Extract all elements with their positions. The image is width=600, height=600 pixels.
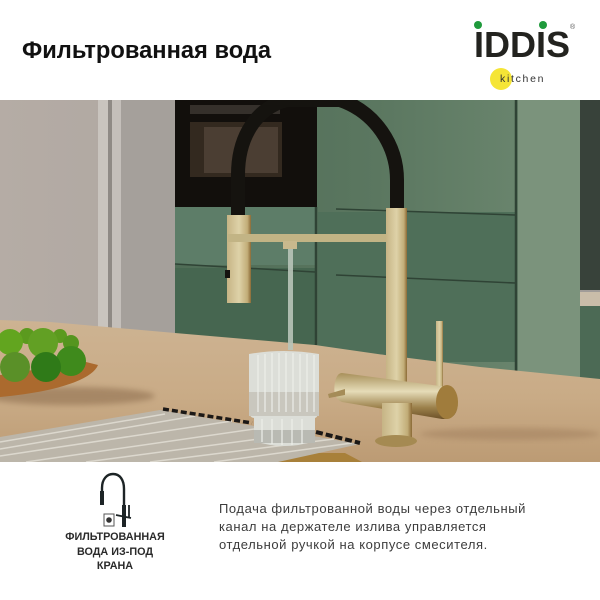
background wall: [0, 100, 600, 462]
wooden countertop: [0, 320, 600, 462]
feature label: КРАНА: [97, 560, 133, 572]
water stream: [288, 248, 293, 350]
photo: kitchen faucet filling a glass: [0, 100, 600, 462]
panel: filtered water feature: [0, 462, 600, 600]
faucet: brass body: [225, 208, 458, 447]
logo: IDDIS kitchen: [474, 21, 576, 90]
faucet: black flexible spout: [238, 100, 397, 216]
title: Фильтрованная вода: [22, 38, 271, 64]
bowl of limes: [0, 328, 98, 397]
counter shadows: [0, 387, 600, 440]
green cabinets: [175, 100, 600, 390]
description: Подача фильтрованной воды через отдельный: [219, 501, 526, 516]
glass of water: [249, 351, 319, 446]
black built-in oven: [175, 100, 317, 207]
feature label: ФИЛЬТРОВАННАЯ: [65, 531, 165, 543]
logo: IDDIS kitchen: ®: [570, 23, 576, 31]
feature label: [65, 531, 165, 572]
dish drying rack: [0, 409, 360, 462]
logo: IDDIS kitchen: kitchen: [500, 73, 545, 85]
sink rim: [272, 453, 362, 462]
description: отдельной ручкой на корпусе смесителя.: [219, 537, 488, 552]
description: канал на держателе излива управляется: [219, 519, 487, 534]
feature label: ВОДА ИЗ-ПОД: [77, 546, 153, 558]
icon: faucet with glass: [100, 472, 132, 527]
description: [219, 501, 526, 552]
logo: IDDIS kitchen: IDDIS: [474, 24, 570, 65]
